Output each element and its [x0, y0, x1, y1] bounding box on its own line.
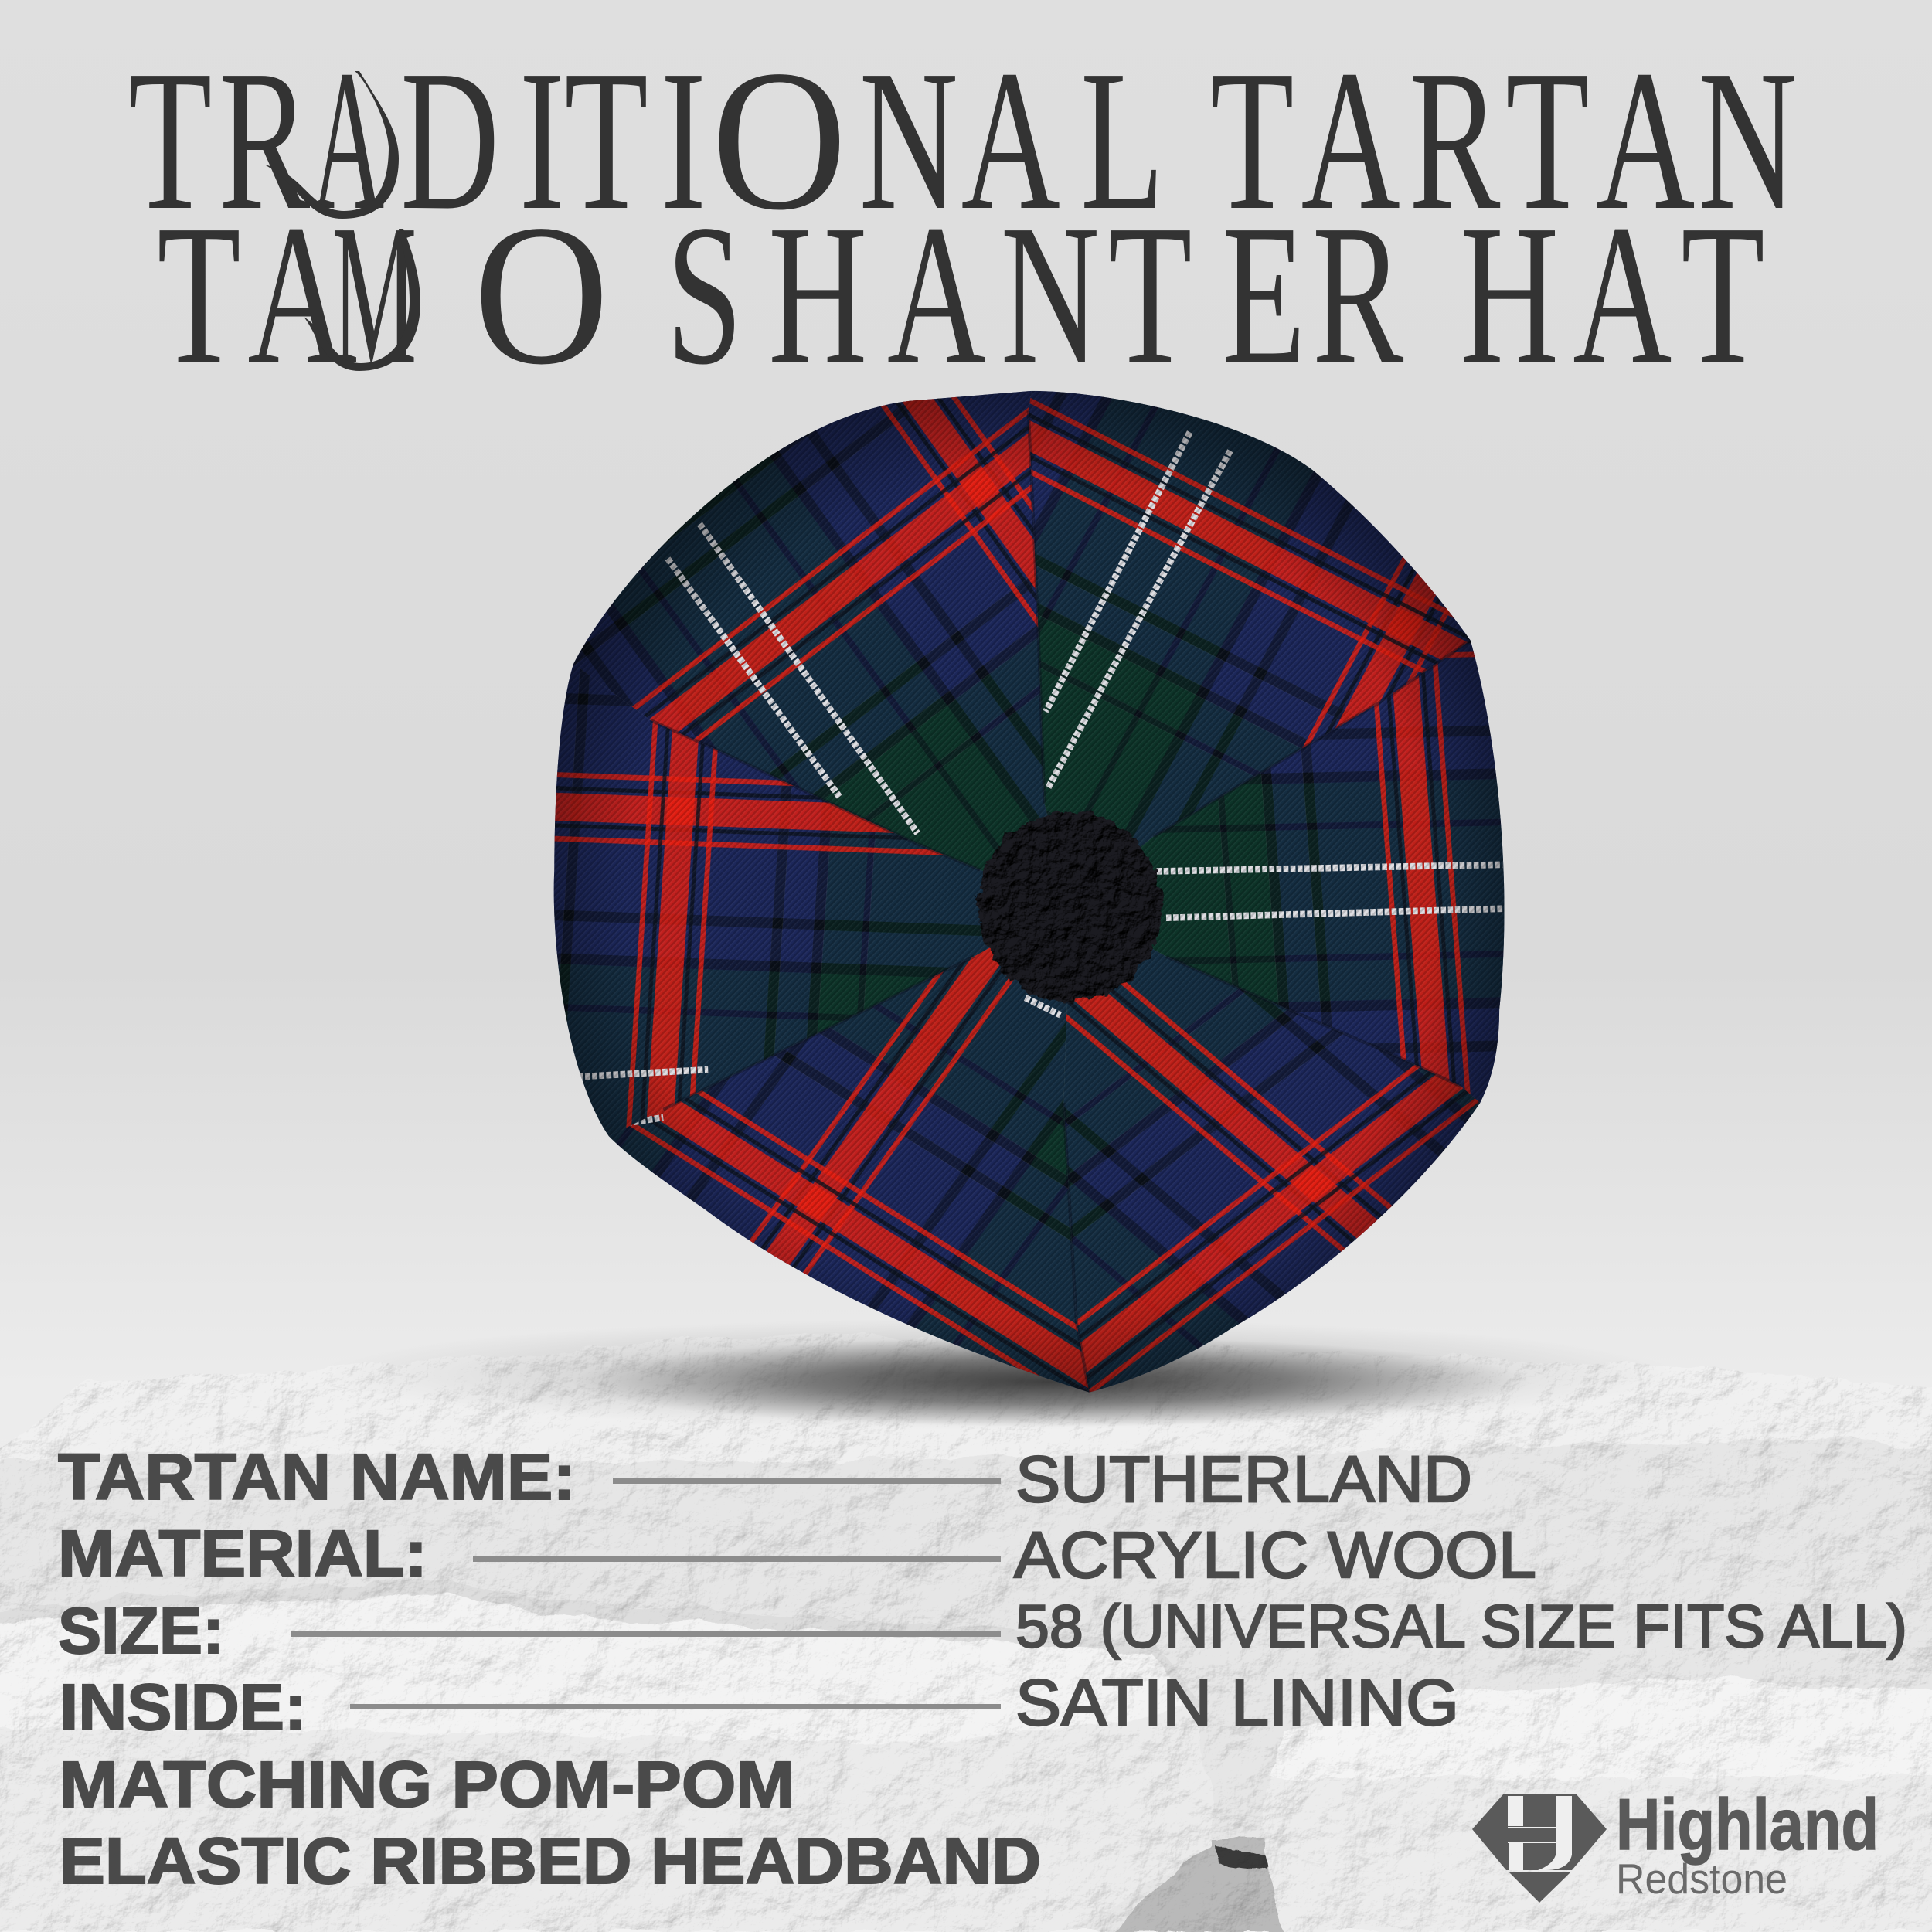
panel: left	[553, 664, 989, 1136]
rock: floor gap	[1113, 1839, 1298, 1932]
rock podium	[0, 1333, 1932, 1932]
title line 2: swash M: M	[332, 183, 417, 407]
soft wide shadow	[317, 1318, 1677, 1430]
title line 1: NAL TARTAN: NAL TARTAN	[859, 29, 1797, 252]
panel: right	[1141, 640, 1504, 1104]
shadow under hat	[317, 1318, 1677, 1430]
rock: back slab front face	[0, 1431, 1932, 1932]
title line 2: TA: TA	[157, 183, 346, 406]
title flourish: A tail	[264, 71, 399, 219]
outer edge shading	[551, 388, 1512, 1399]
value: inside: SATIN LINING	[1015, 1666, 1459, 1739]
logo: Highland Redstone	[1472, 1784, 1879, 1903]
connector line 4	[350, 1704, 1001, 1709]
value: tartan name: SUTHERLAND	[1015, 1443, 1472, 1515]
value: material: ACRYLIC WOOL	[1014, 1519, 1536, 1591]
fabric twill texture	[551, 388, 1512, 1399]
spec table	[58, 1440, 1907, 1897]
title line 1: O: O	[712, 28, 847, 252]
rock: right block face	[1260, 1770, 1932, 1932]
title flourish: M tail	[304, 229, 420, 371]
feature: matching pom-pom: MATCHING POM-POM	[60, 1748, 794, 1821]
wordmark: Redstone: Redstone	[1616, 1855, 1787, 1903]
panel: bottom right	[1063, 949, 1481, 1393]
label: inside: INSIDE:	[60, 1671, 307, 1743]
panel: bottom left	[609, 947, 1090, 1393]
rock: right block top	[1271, 1677, 1932, 1777]
icon: diamond monogram	[1472, 1794, 1607, 1903]
title line 1: TR: TR	[128, 29, 310, 252]
label: tartan name: TARTAN NAME:	[58, 1440, 576, 1513]
rock: gap shadow	[1215, 1845, 1275, 1870]
connector line 2	[473, 1556, 1001, 1562]
rock: back slab top surface	[0, 1333, 1932, 1468]
connector line 1	[613, 1478, 1001, 1484]
rock: left block top	[0, 1594, 1194, 1743]
hat: tartan tam o shanter	[551, 388, 1512, 1399]
feature: elastic ribbed headband: ELASTIC RIBBED HEADBAND	[60, 1825, 1041, 1897]
rock: left block cast shadow	[0, 1580, 1206, 1716]
title	[128, 28, 1797, 407]
panel: top right	[1028, 391, 1471, 847]
wordmark: Highland: Highland	[1616, 1784, 1879, 1865]
rock: left block face	[0, 1662, 1212, 1932]
connector line 3	[291, 1631, 1001, 1637]
value: size: 58 (UNIVERSAL SIZE FITS ALL)	[1015, 1592, 1907, 1660]
title line 2: SHANTER HAT: SHANTER HAT	[666, 183, 1765, 406]
label: size: SIZE:	[58, 1594, 224, 1667]
title line 2: O: O	[474, 182, 609, 406]
seam shading	[651, 411, 1471, 1393]
panel: top left	[573, 391, 1048, 871]
icon: pom-pom	[978, 811, 1162, 1002]
dark core shadow	[572, 1337, 1530, 1427]
title line 1: DITI: DITI	[400, 29, 706, 252]
hat body	[551, 388, 1512, 1399]
title line 1: swash A: A	[311, 28, 384, 252]
label: material: MATERIAL:	[58, 1517, 427, 1590]
